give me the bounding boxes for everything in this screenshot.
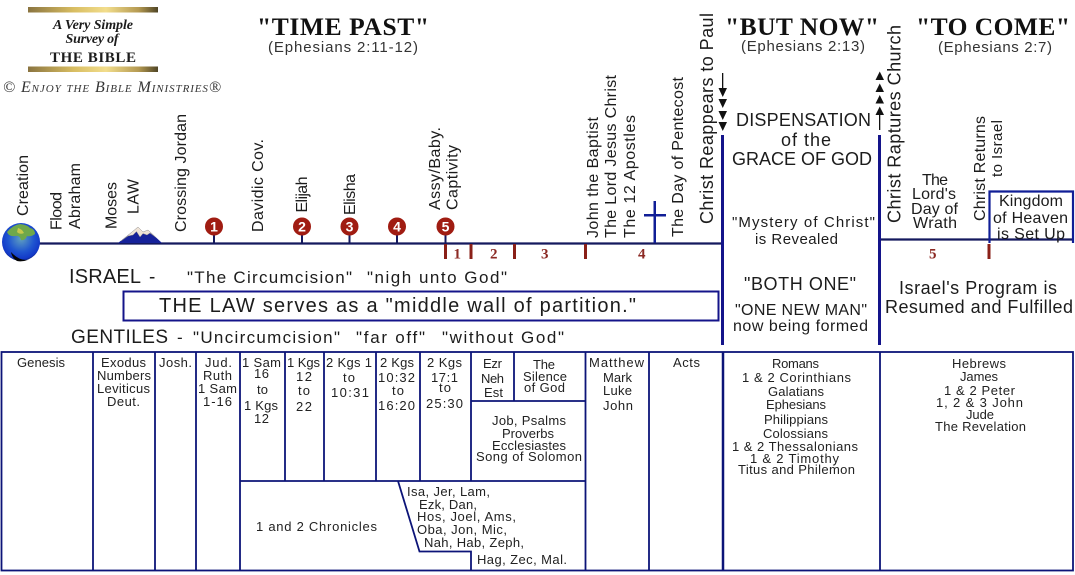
event labels along timeline: LAW: [126, 178, 142, 214]
cell: 1 Sam 16 to 1 Kgs 12: [242, 355, 281, 426]
cell: Judges Ruth: [198, 355, 237, 409]
event labels along timeline: The Day of Pentecost: [670, 76, 687, 237]
cell: The Silence of God: Silence: [523, 369, 567, 384]
box: Kingdom of Heaven: is Set Up: [997, 226, 1065, 243]
heading: Time Past: [257, 12, 429, 56]
cell: Judges Ruth: Ruth: [203, 368, 232, 383]
cell: 2 Kgs 1 to 10:31: 2 Kgs 1: [326, 355, 372, 370]
cell: Pauline epistles: [732, 356, 858, 477]
cell: 2 Kgs 1 to 10:31: [326, 355, 372, 400]
cell: 1 Kgs 12 to 22: 22: [296, 399, 312, 414]
copyright line: © Enjoy the Bible Ministries®: [3, 79, 221, 96]
icon: globe: [2, 223, 40, 261]
cell: 2 Kgs 1 to 10:31: 10:31: [331, 385, 369, 400]
cell: Pauline epistles: Philippians: [764, 412, 828, 427]
cell: Ezra Nehemiah Esther: Est: [484, 385, 503, 400]
logo: A Very Simple Survey of The Bible: A Very Simple: [52, 18, 133, 33]
event labels along timeline: Elijah: [294, 176, 311, 212]
heading: But Now: (Ephesians 2:13): [741, 38, 865, 55]
text: Mystery of Christ: [732, 214, 875, 248]
cell: Gospels: Luke: [603, 383, 632, 398]
cell: Gospels: John: [603, 398, 633, 413]
cell: Hebrew epistles and Revelation: [935, 356, 1026, 434]
period ticks and numbers: 2: [490, 246, 498, 262]
cell: Pauline epistles: 1 & 2 Timothy: [750, 451, 840, 466]
cell: 2 Kgs 10:32 to 16:20: 10:32: [378, 370, 415, 385]
cell: Judges Ruth: 1 Sam: [198, 381, 237, 396]
text: Dispensation of the Grace of God: of the: [781, 130, 831, 150]
Israel row: ISRAEL: [69, 266, 141, 288]
divider: Christ Reappears to Paul with descending arrows: [718, 73, 727, 345]
event labels along timeline: Captivity: [444, 145, 462, 210]
event labels along timeline: Davidic Cov.: [250, 139, 267, 232]
cell: Pauline epistles: Titus and Philemon: [738, 462, 855, 477]
timeline: Time Past axis: [38, 242, 722, 245]
cell: Pauline epistles: Galatians: [768, 384, 824, 399]
cell: Pauline epistles: Romans: [772, 356, 820, 371]
cell: Hebrew epistles and Revelation: The Revelation: [935, 419, 1026, 434]
event labels along timeline: John the Baptist: [585, 116, 602, 238]
text: Israel's Program: [885, 278, 1073, 317]
cell: Wisdom books: Song of Solomon: [476, 449, 582, 464]
cell: 2 Kgs 17:1 to 25:30: to: [439, 380, 451, 395]
cell: 2 Kgs 10:32 to 16:20: 2 Kgs: [380, 355, 414, 370]
cell: 2 Kgs 10:32 to 16:20: 16:20: [378, 398, 415, 413]
text: The Lord's Day of Wrath: Day of: [911, 201, 959, 218]
event labels along timeline: The 12 Apostles: [622, 115, 639, 238]
cell: Judges Ruth: 1-16: [203, 394, 232, 409]
heading: But Now: "BUT NOW": [725, 12, 879, 41]
cell: 2 Kgs 1 to 10:31: to: [343, 370, 355, 385]
event labels along timeline: Abraham: [67, 163, 84, 229]
cell: Hebrew epistles and Revelation: Jude: [966, 407, 994, 422]
event labels along timeline: Christ Reappears to Paul: [697, 13, 717, 224]
event labels along timeline: Christ Returns: [972, 116, 989, 221]
cell: 1 Kgs 12 to 22: 1 Kgs: [287, 355, 320, 370]
logo: A Very Simple Survey of The Bible: Survey of: [66, 32, 120, 47]
cell: 1 Kgs 12 to 22: to: [298, 383, 310, 398]
period ticks and numbers: 4: [638, 246, 646, 262]
heading: Time Past: "TIME PAST": [257, 12, 429, 41]
Israel row: "The Circumcision": [187, 268, 352, 287]
text: Both One: "BOTH ONE": [744, 274, 856, 294]
numbered markers 1 to 5: 5: [442, 218, 450, 234]
cell: Prophets: Hos, Joel, Ams,: [417, 509, 516, 524]
text: The Lord's Day of Wrath: The: [922, 172, 948, 189]
text: Mystery of Christ: "Mystery of Christ": [732, 214, 875, 231]
event labels along timeline: Elisha: [342, 174, 359, 215]
cell: Law books: Deut.: [107, 394, 140, 409]
cell: Pauline epistles: 1 & 2 Corinthians: [742, 370, 852, 385]
heading: To Come: "TO COME": [916, 12, 1070, 41]
cell: Law books: Numbers: [97, 368, 152, 383]
cell: Ezra Nehemiah Esther: Ezr: [483, 356, 503, 371]
cell: 1 and 2 Chronicles: 1 and 2 Chronicles: [256, 519, 378, 534]
text: Israel's Program: Resumed and Fulfilled: [885, 297, 1073, 317]
cell: Prophets: Isa, Jer, Lam,: [407, 484, 490, 499]
heading: To Come: (Ephesians 2:7): [938, 39, 1052, 56]
Gentiles row: [71, 327, 564, 348]
cell: Acts: Acts: [673, 355, 700, 370]
timeline: To Come axis: [880, 238, 1074, 241]
box: Kingdom of Heaven: Kingdom: [999, 193, 1063, 210]
cell: 1 Sam 16 to 1 Kgs 12: 16: [254, 366, 269, 381]
cell: 1 Sam 16 to 1 Kgs 12: 1 Kgs: [244, 398, 278, 413]
event labels along timeline: Creation: [15, 155, 32, 216]
Gentiles row: "Uncircumcision": [193, 328, 340, 347]
text: Israel's Program: Israel's Program is: [899, 278, 1057, 298]
period ticks and numbers: 3: [541, 246, 548, 262]
logo: A Very Simple Survey of The Bible: THE BIBLE: [50, 50, 136, 66]
text: Both One: now being formed: [733, 318, 868, 335]
cell: Wisdom books: Job, Psalms: [492, 413, 566, 428]
cell: Prophets: Nah, Hab, Zeph,: [424, 535, 524, 550]
cell: Wisdom books: Ecclesiastes: [492, 438, 566, 453]
cell: The Silence of God: The: [533, 357, 555, 372]
cell: Ezra Nehemiah Esther: Neh: [481, 371, 504, 386]
box: The Law middle wall of partition: [124, 292, 718, 320]
table: Bible books grid: [2, 352, 1073, 570]
numbered markers 1 to 5: 3: [346, 218, 354, 234]
text: Mystery of Christ: is Revealed: [755, 231, 838, 248]
cell: 1 Kgs 12 to 22: [287, 355, 320, 414]
cell: Pauline epistles: Colossians: [763, 426, 828, 441]
cell: Genesis: Genesis: [17, 355, 66, 370]
cell: 1 Kgs 12 to 22: 12: [296, 369, 312, 384]
cell: Gospels: [589, 355, 645, 413]
cell: Wisdom books: [476, 413, 582, 464]
cell: Prophets: Ezk, Dan,: [419, 497, 477, 512]
Israel row: "nigh unto God": [367, 268, 507, 287]
event labels along timeline: to Israel: [989, 120, 1006, 177]
Israel row: -: [149, 267, 155, 288]
icon: cross: [644, 201, 666, 243]
period ticks and numbers: [444, 244, 990, 262]
cell: Judges Ruth: Jud.: [205, 355, 232, 370]
numbered markers 1 to 5: 4: [393, 218, 401, 234]
cell: 1 Sam 16 to 1 Kgs 12: 1 Sam: [242, 355, 281, 370]
event labels along timeline: Crossing Jordan: [173, 114, 190, 232]
cell: Hebrew epistles and Revelation: James: [960, 369, 998, 384]
event labels along timeline: Flood: [48, 192, 66, 230]
cell: Pauline epistles: 1 & 2 Thessalonians: [732, 439, 858, 454]
icon: mountains: [118, 227, 162, 243]
heading: To Come: [916, 12, 1070, 56]
text: The Lord's Day of Wrath: Lord's: [912, 186, 956, 203]
numbered markers 1 to 5: 1: [210, 218, 218, 234]
cell: 1 Sam 16 to 1 Kgs 12: to: [257, 382, 268, 397]
cell: Law books: [97, 355, 152, 409]
cell: 2 Kgs 10:32 to 16:20: to: [392, 383, 404, 398]
event labels along timeline: The Lord Jesus Christ: [603, 74, 620, 238]
period ticks and numbers: 1: [454, 246, 461, 262]
text: Dispensation of the Grace of God: [732, 110, 872, 169]
text: The Lord's Day of Wrath: [911, 172, 959, 232]
text: Both One: [733, 274, 868, 335]
period ticks and numbers: 5: [929, 246, 936, 262]
Gentiles row: "without God": [442, 328, 564, 347]
Gentiles row: -: [177, 328, 183, 347]
cell: Prophets: [407, 484, 567, 567]
cell: Joshua: Josh.: [159, 355, 192, 370]
cell: 2 Kgs 17:1 to 25:30: 17:1: [431, 370, 458, 385]
cell: 2 Kgs 17:1 to 25:30: [426, 355, 463, 411]
text: Dispensation of the Grace of God: GRACE OF GOD: [732, 149, 872, 169]
cell: The Silence of God: [523, 357, 567, 395]
logo: A Very Simple Survey of The Bible: [28, 7, 158, 72]
text: The Lord's Day of Wrath: Wrath: [913, 215, 957, 232]
event labels along timeline: Assy/Baby.: [427, 127, 444, 210]
cell: The Silence of God: of God: [524, 380, 565, 395]
text: Both One: "ONE NEW MAN": [735, 302, 867, 319]
Gentiles row: "far off": [356, 328, 425, 347]
box: Kingdom of Heaven: of Heaven: [993, 210, 1068, 227]
cell: 2 Kgs 10:32 to 16:20: [378, 355, 415, 413]
event labels along timeline: Moses: [104, 182, 120, 229]
text: Dispensation of the Grace of God: DISPENSATION: [736, 110, 871, 130]
cell: Law books: Leviticus: [97, 381, 150, 396]
cell: Ezra Nehemiah Esther: [481, 356, 504, 400]
cell: Prophets: Oba, Jon, Mic,: [417, 522, 507, 537]
Israel row: [69, 266, 507, 288]
cell: 2 Kgs 17:1 to 25:30: 25:30: [426, 396, 463, 411]
cell: Gospels: Matthew: [589, 355, 645, 370]
cell: Law books: Exodus: [101, 355, 146, 370]
cell: Gospels: Mark: [603, 370, 632, 385]
cell: Prophets: Hag, Zec, Mal.: [477, 552, 567, 567]
event labels along timeline: [15, 13, 1006, 238]
cell: 1 Sam 16 to 1 Kgs 12: 12: [254, 411, 269, 426]
box: The Law middle wall of partition: THE LAW serves as a "middle wall of partition.": [159, 295, 636, 317]
divider: Christ Raptures Church with ascending arrows: [876, 72, 884, 345]
numbered markers 1 to 5: 2: [298, 218, 306, 234]
heading: Time Past: (Ephesians 2:11-12): [268, 39, 418, 56]
numbered markers 1 to 5: [205, 218, 454, 243]
box: Kingdom of Heaven: [990, 192, 1073, 243]
cell: 2 Kgs 17:1 to 25:30: 2 Kgs: [427, 355, 462, 370]
event labels along timeline: Christ Raptures Church: [884, 25, 904, 223]
cell: Hebrew epistles and Revelation: Hebrews: [952, 356, 1006, 371]
Gentiles row: GENTILES: [71, 327, 168, 348]
cell: Hebrew epistles and Revelation: 1, 2 & 3 John: [936, 395, 1023, 410]
heading: But Now: [725, 12, 879, 55]
cell: Wisdom books: Proverbs: [502, 426, 554, 441]
cell: Hebrew epistles and Revelation: 1 & 2 Peter: [944, 383, 1016, 398]
cell: Pauline epistles: Ephesians: [766, 397, 826, 412]
